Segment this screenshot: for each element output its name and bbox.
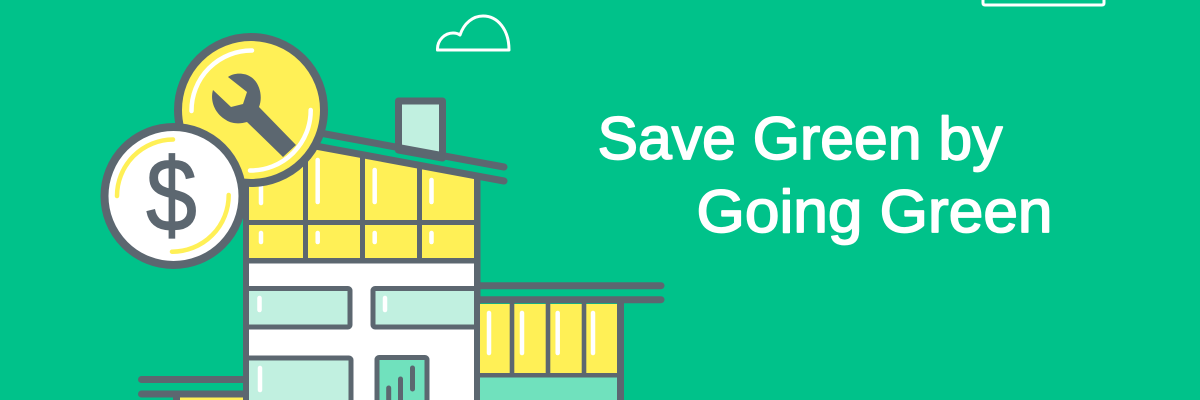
right annex (478, 286, 661, 400)
solar panel roof section (249, 133, 474, 260)
white house body (246, 258, 477, 400)
dollar sign: $ (146, 137, 197, 253)
icon: wrench coin (178, 37, 324, 183)
house walls (243, 176, 480, 400)
upper left window (246, 288, 350, 327)
title (598, 105, 1052, 245)
lower left window (246, 358, 351, 400)
coin highlights (117, 140, 229, 252)
left annex (142, 380, 245, 400)
house illustration (142, 101, 661, 400)
title: Save Green by (598, 105, 1002, 172)
icon: dollar coin (104, 127, 242, 265)
title: Going Green (696, 178, 1052, 245)
chimney (398, 101, 442, 158)
wrench (212, 74, 296, 157)
coin highlights (191, 50, 311, 171)
door with glass (377, 358, 427, 400)
roof lines (310, 133, 504, 181)
icon: cloud outline (437, 16, 509, 50)
upper right window (373, 288, 477, 327)
icon: partial window outline at top edge (983, 0, 1104, 5)
